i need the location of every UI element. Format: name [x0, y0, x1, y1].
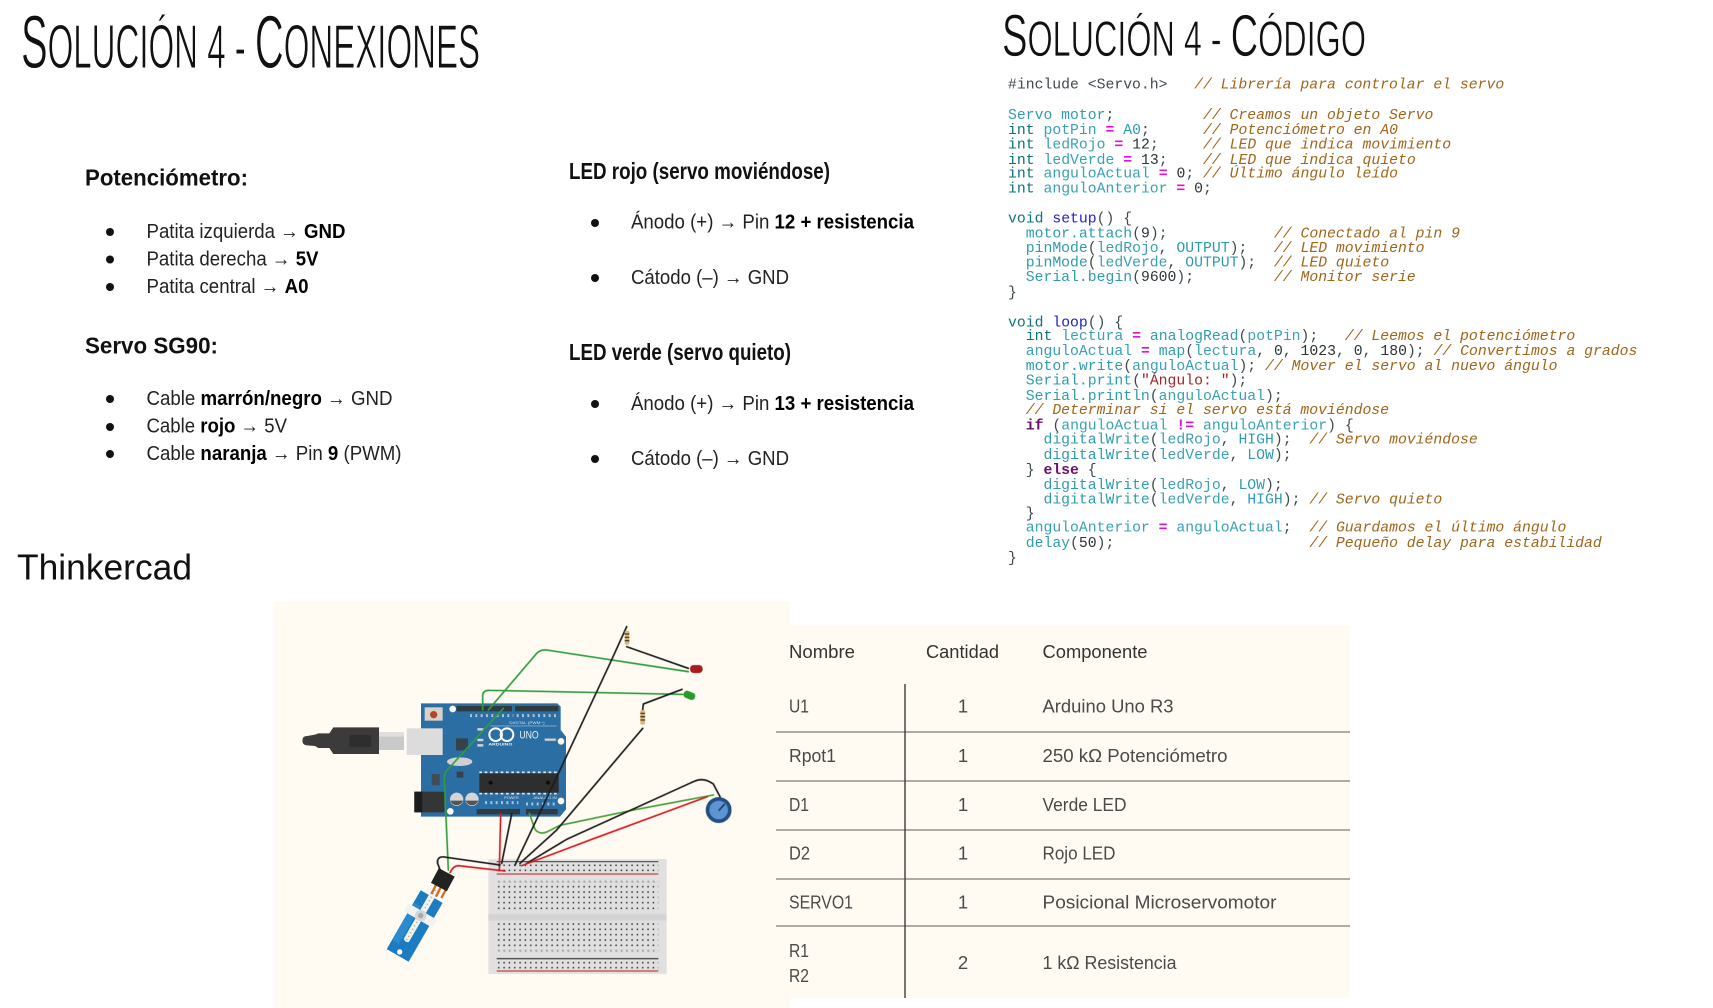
row: D2 [789, 842, 1116, 864]
USB cable [302, 727, 404, 754]
code block: Arduino sketch: void loop() { [1008, 316, 1123, 332]
row: D1: Verde LED [1042, 794, 1126, 815]
heading: LED verde: LED verde (servo quieto) [569, 339, 791, 365]
title: Solución 4 - Código: SOLUCIÓN 4 - CÓDIGO [1002, 3, 1366, 69]
list item: patita central: Patita central → A0 [146, 275, 308, 298]
panel: table background [776, 625, 1350, 998]
panel: LED rojo connections [569, 158, 915, 289]
list item: cátodo verde: Cátodo (–) → GND [631, 447, 789, 470]
table header: Nombre [789, 641, 855, 662]
row: D2: 1 [958, 842, 968, 864]
heading: Thinkercad: Thinkercad [17, 546, 192, 588]
code block: Arduino sketch: int anguloActual = 0; // Último ángulo leído [1008, 164, 1398, 182]
code block: Arduino sketch: digitalWrite(ledRojo, HIGH); // Servo moviéndose [1008, 432, 1478, 448]
red LED [690, 665, 703, 673]
row: U1 [789, 696, 1174, 716]
code block: Arduino sketch: pinMode(ledVerde, OUTPUT); // LED quieto [1008, 256, 1389, 272]
row: R1 R2: R1 [789, 940, 809, 961]
row: SERVO1: 1 [958, 892, 968, 912]
list item: ánodo rojo: Ánodo (+) → Pin 12 + resistencia [631, 210, 915, 234]
table header [789, 641, 1148, 662]
code block: Arduino sketch: void setup() { [1008, 212, 1132, 228]
row: SERVO1: Posicional Microservomotor [1042, 892, 1276, 912]
code block: Arduino sketch: } [1008, 551, 1017, 567]
row: D1: D1 [789, 794, 809, 815]
list item: cable naranja: Cable naranja → Pin 9 (PWM) [146, 442, 402, 465]
row: Rpot1: Rpot1 [789, 745, 836, 766]
row: U1: U1 [789, 696, 809, 716]
row: SERVO1: SERVO1 [789, 892, 853, 912]
code block: Arduino sketch: } else { [1008, 463, 1097, 479]
servo motor [383, 868, 455, 964]
code block: Arduino sketch: int ledVerde = 13; // LED que indica quieto [1008, 153, 1416, 169]
code block: Arduino sketch: anguloActual = map(lectura, 0, 1023, 0, 180); // Convertimos a grados [1008, 344, 1637, 360]
code block: Arduino sketch: delay(50); // Pequeño delay para estabilidad [1008, 536, 1602, 552]
code block: Arduino sketch: int ledRojo = 12; // LED que indica movimiento [1008, 138, 1451, 154]
code block: Arduino sketch: Serial.print("Ángulo: "); [1008, 372, 1247, 390]
table header: Cantidad [926, 641, 999, 662]
list item: ánodo verde: Ánodo (+) → Pin 13 + resistencia [631, 392, 915, 415]
panel: potenciómetro connections [85, 164, 346, 298]
code block: Arduino sketch: // Determinar si el servo está moviéndose [1008, 403, 1389, 419]
Arduino Uno board [407, 703, 566, 817]
resistor R1 [625, 631, 629, 645]
code block: Arduino sketch [1008, 78, 1637, 567]
Arduino Uno board: POWER [504, 796, 519, 800]
panel: LED verde connections [569, 339, 915, 470]
row: U1: Arduino Uno R3 [1042, 696, 1174, 716]
row: D1 [789, 794, 1126, 815]
potentiometer [706, 797, 732, 823]
row: R1 R2: 2 [958, 952, 968, 973]
table: components list [776, 641, 1350, 998]
circuit diagram [302, 627, 732, 974]
code block: Arduino sketch: Serial.println(anguloActual); [1008, 389, 1283, 405]
row: D2: D2 [789, 842, 810, 864]
code block: Arduino sketch: } [1008, 506, 1035, 522]
list item: patita izquierda: Patita izquierda → GND [146, 220, 346, 243]
code block: Arduino sketch: Servo motor; // Creamos un objeto Servo [1008, 108, 1433, 124]
row: SERVO1 [789, 892, 1276, 912]
wires [438, 627, 720, 873]
table header: Componente [1042, 641, 1148, 662]
panel: servo SG90 connections [85, 332, 402, 465]
code block: Arduino sketch: int potPin = A0; // Potenciómetro en A0 [1008, 123, 1398, 139]
code block: Arduino sketch: Serial.begin(9600); // Monitor serie [1008, 270, 1416, 286]
resistor R2 [640, 710, 645, 725]
code block: Arduino sketch: motor.write(anguloActual); // Mover el servo al nuevo ángulo [1008, 359, 1558, 375]
heading: Servo SG90: Servo SG90: [85, 332, 218, 358]
row: U1: 1 [958, 696, 968, 716]
code block: Arduino sketch: } [1008, 286, 1017, 302]
row: R1 R2: 1 kΩ Resistencia [1042, 952, 1177, 973]
code block: Arduino sketch: #include <Servo.h> // Librería para controlar el servo [1008, 78, 1504, 94]
heading: Potenciómetro: Potenciómetro: [85, 164, 248, 190]
row: R1 R2 [789, 940, 1177, 986]
list item: cable rojo: Cable rojo → 5V [146, 414, 287, 438]
breadboard [488, 859, 667, 974]
row: D2: Rojo LED [1042, 842, 1116, 864]
row: Rpot1 [789, 745, 1228, 766]
list item: patita derecha: Patita derecha → 5V [146, 248, 319, 270]
code block: Arduino sketch: pinMode(ledRojo, OUTPUT); // LED movimiento [1008, 241, 1425, 257]
code block: Arduino sketch: int lectura = analogRead(potPin); // Leemos el potenciómetro [1008, 329, 1575, 345]
code block: Arduino sketch: anguloAnterior = anguloActual; // Guardamos el último ángulo [1008, 520, 1566, 536]
panel: circuit background [274, 601, 790, 1008]
code block: Arduino sketch: digitalWrite(ledRojo, LOW); [1008, 478, 1283, 494]
title: Solución 4 - Conexiones: SOLUCIÓN 4 - CONEXIONES [21, 0, 480, 84]
list item: cátodo rojo: Cátodo (–) → GND [631, 266, 789, 289]
code block: Arduino sketch: if (anguloActual != anguloAnterior) { [1008, 418, 1354, 434]
list item: cable marrón/negro: Cable marrón/negro → GND [146, 387, 392, 410]
green LED [682, 690, 696, 701]
code block: Arduino sketch: int anguloAnterior = 0; [1008, 182, 1212, 198]
code block: Arduino sketch: motor.attach(9); // Conectado al pin 9 [1008, 226, 1460, 242]
Arduino Uno board: ARDUINO [488, 742, 513, 746]
row: D1: 1 [958, 794, 968, 815]
heading: LED rojo: LED rojo (servo moviéndose) [569, 158, 830, 184]
Arduino Uno board: UNO [519, 730, 539, 742]
row: Rpot1: 1 [958, 745, 968, 766]
Arduino Uno board: ANALOG IN [533, 796, 557, 800]
row: R1 R2: R2 [789, 965, 809, 986]
row: Rpot1: 250 kΩ Potenciómetro [1042, 745, 1228, 766]
code block: Arduino sketch: digitalWrite(ledVerde, HIGH); // Servo quieto [1008, 492, 1442, 508]
Arduino Uno board: DIGITAL (PWM~) [509, 721, 545, 725]
code block: Arduino sketch: digitalWrite(ledVerde, LOW); [1008, 448, 1292, 464]
